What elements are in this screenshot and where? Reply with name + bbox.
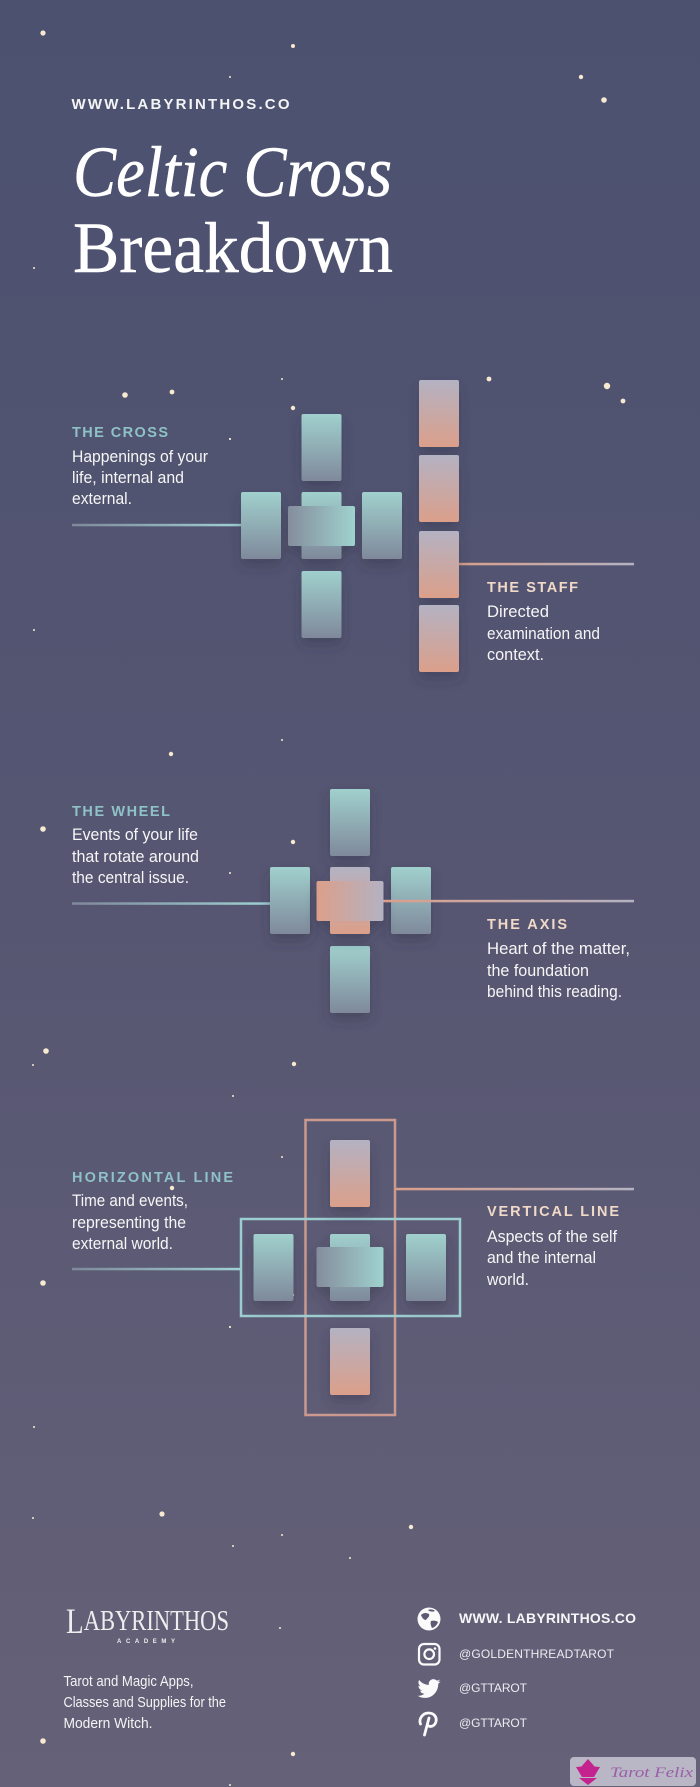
panel: horizontal and vertical lines [72, 1120, 634, 1415]
text: the cross: THE CROSS [72, 425, 168, 441]
text: the wheel: the central issue. [72, 869, 189, 887]
social links: @GOLDENTHREADTAROT [459, 1647, 615, 1661]
text: the cross: external. [72, 490, 132, 508]
footer description: Modern Witch. [64, 1715, 152, 1732]
social links: @GTTAROT [459, 1681, 528, 1695]
text: the axis [487, 917, 630, 1001]
text: the axis: behind this reading. [487, 983, 622, 1001]
text: horizontal line: representing the [72, 1214, 186, 1232]
line: axis [384, 900, 634, 902]
line: cross [72, 524, 242, 526]
text: the axis: Heart of the matter, [487, 940, 630, 958]
cards: staff [419, 380, 459, 672]
text: the staff [487, 580, 600, 664]
cards: vertical [330, 1140, 370, 1395]
text: the cross: Happenings of your [72, 448, 208, 466]
footer logo: ABYRINTHOS [84, 1606, 229, 1637]
line: horizontal [72, 1268, 241, 1270]
panel: the wheel and the axis [72, 789, 634, 1013]
text: the staff: THE STAFF [487, 580, 578, 596]
cards: cross [241, 414, 402, 638]
text: the wheel [72, 804, 199, 887]
footer description: Tarot and Magic Apps, [64, 1673, 194, 1690]
frame: vertical [306, 1120, 395, 1415]
text: the staff: Directed [487, 603, 549, 621]
text: vertical line: and the internal [487, 1249, 596, 1267]
social links [459, 1610, 636, 1730]
text: the staff: examination and [487, 625, 600, 643]
site url heading: WWW.LABYRINTHOS.CO [72, 96, 290, 113]
text: vertical line [486, 1204, 619, 1289]
text: horizontal line: external world. [72, 1235, 173, 1253]
line: vertical [395, 1188, 634, 1190]
line: wheel [72, 902, 271, 905]
cards: wheel [270, 789, 431, 1013]
text: vertical line: VERTICAL LINE [487, 1204, 619, 1220]
footer description [64, 1673, 226, 1732]
text: vertical line: Aspects of the self [487, 1228, 617, 1246]
text: horizontal line: HORIZONTAL LINE [72, 1170, 233, 1186]
icon: lotus [576, 1759, 600, 1785]
text: horizontal line [72, 1170, 233, 1253]
line: staff [459, 563, 634, 565]
title [73, 132, 393, 288]
frame: horizontal [241, 1219, 460, 1316]
text: vertical line: world. [486, 1271, 529, 1289]
icon: globe [418, 1608, 440, 1630]
title: Breakdown [73, 208, 393, 288]
text: the wheel: THE WHEEL [72, 804, 170, 820]
text: the cross [72, 425, 208, 508]
watermark badge [570, 1757, 696, 1786]
icon: instagram [419, 1644, 440, 1664]
icon: twitter [418, 1679, 441, 1698]
footer logo: L [66, 1601, 84, 1641]
social links: @GTTAROT [459, 1716, 528, 1730]
icon: pinterest [420, 1713, 436, 1735]
panel: the cross and the staff [72, 380, 634, 672]
text: the axis: THE AXIS [487, 917, 567, 933]
footer description: Classes and Supplies for the [64, 1694, 226, 1711]
text: the staff: context. [487, 646, 544, 664]
title: Celtic Cross [73, 132, 392, 212]
social links: WWW. LABYRINTHOS.CO [459, 1610, 636, 1626]
footer logo: ACADEMY [117, 1639, 175, 1645]
cards: axis [316, 867, 384, 934]
text: the cross: life, internal and [72, 469, 184, 487]
text: the axis: the foundation [487, 962, 589, 980]
watermark badge: Tarot Felix [610, 1765, 693, 1781]
text: horizontal line: Time and events, [72, 1192, 188, 1210]
cards: horizontal [254, 1234, 446, 1301]
text: the wheel: that rotate around [72, 848, 199, 866]
text: the wheel: Events of your life [72, 826, 198, 844]
footer logo [66, 1601, 229, 1645]
